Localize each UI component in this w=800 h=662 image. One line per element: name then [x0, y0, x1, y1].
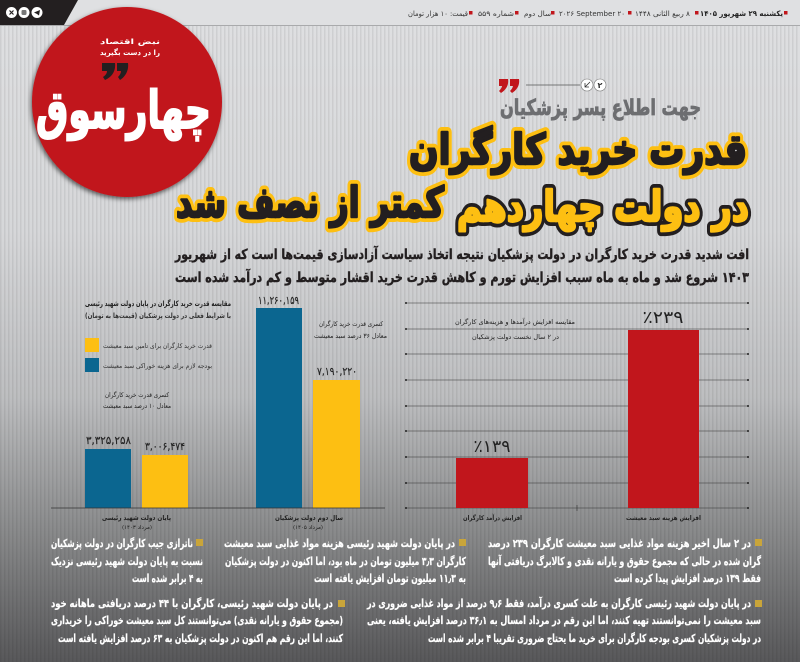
bullet text: top left: ناترازی جیب کارگران در دولت پزشکیان — [51, 537, 193, 550]
bars: second year of Pezeshkian government: ۷,۱۹۰,۲۲۰ — [317, 365, 357, 378]
headline line 2: black part: کمتر از نصف شد — [176, 178, 444, 228]
logo: red circle — [32, 7, 222, 197]
bullet text: top right: فقط ۱۳۹ درصد افزایش پیدا کرده است — [614, 572, 761, 585]
chart: purchasing power comparison — [51, 294, 387, 531]
legend: بودجه لازم برای هزینه خوراکی سبد معیشت — [103, 362, 212, 370]
header date line: سال دوم — [524, 10, 551, 18]
header bar: social icons — [0, 0, 78, 25]
chart note: در ۲ سال نخست دولت پزشکیان — [472, 333, 559, 341]
chart title — [85, 299, 231, 320]
bullet text: top left: نسبت به پایان دولت شهید رئیسی نزدیک — [51, 555, 203, 568]
note: first period shortfall: کسری قدرت خرید کارگران — [105, 391, 170, 399]
axis labels: سال دوم دولت پزشکیان — [275, 514, 343, 522]
bars: end of Raisi government — [85, 434, 188, 508]
axis labels: (مرداد ۱۴۰۵) — [293, 525, 323, 531]
header date line — [408, 9, 788, 18]
bullet text: bottom left: در پایان دولت شهید رئیسی، کارگران با ۴۴ درصد دریافتی ماهانه خود — [51, 597, 333, 610]
bullet text: top middle: در پایان دولت شهید رئیسی هزینه مواد غذایی سبد معیشت — [224, 537, 455, 550]
note: second period shortfall: کسری قدرت خرید کارگران — [319, 320, 384, 328]
bars: second year of Pezeshkian government — [256, 294, 360, 508]
bar: income increase: افزایش درآمد کارگران — [463, 513, 522, 522]
logo: red circle: نبض اقتصاد — [100, 37, 160, 46]
chart title: مقایسه قدرت خرید کارگران در پایان دولت شهید رئیسی — [85, 299, 231, 308]
chart: income vs cost increase — [405, 302, 749, 522]
axis labels: پایان دولت شهید رئیسی — [102, 514, 171, 522]
legend: قدرت خرید کارگران برای تامین سبد معیشت — [103, 342, 212, 350]
kicker: جهت اطلاع پسر پزشکیان — [500, 96, 701, 121]
grid end dots — [405, 302, 749, 509]
bars: end of Raisi government: ۳,۰۰۶,۴۷۴ — [145, 440, 185, 453]
axis labels: (مرداد ۱۴۰۳) — [122, 525, 152, 531]
quote marks and numbered marker — [499, 79, 606, 93]
note: second period shortfall: معادل ۳۶ درصد سبد معیشت — [314, 332, 387, 340]
note: second period shortfall — [314, 320, 387, 340]
header date line: شماره ۵۵۹ — [478, 10, 514, 18]
lead paragraph — [174, 245, 749, 286]
logo: red circle: را در دست بگیرید — [100, 48, 160, 57]
chart title: با شرایط فعلی در دولت پزشکیان (قیمت‌ها به تومان) — [85, 312, 231, 320]
chart note: مقایسه افزایش درآمدها و هزینه‌های کارگران — [455, 317, 575, 326]
axis labels — [102, 514, 343, 531]
note: first period shortfall — [103, 391, 171, 410]
bullet text: top left: به ۴ برابر شده است — [132, 572, 203, 585]
header date line: ۸ ربیع الثانی ۱۴۴۸ — [635, 10, 690, 18]
bullet text: top right: در ۲ سال اخیر هزینه مواد غذایی سبد معیشت کارگران ۲۳۹ درصد — [488, 537, 751, 550]
chart note — [455, 317, 575, 341]
axis — [51, 507, 385, 509]
bullet text: top middle: به ۱۱٫۳ میلیون تومان افزایش یافته است — [314, 572, 466, 585]
bar: cost of living increase: ٪۲۳۹ — [642, 308, 684, 328]
bar: income increase: ٪۱۳۹ — [474, 437, 510, 457]
header date line: یکشنبه ۲۹ شهریور ۱۴۰۵ — [700, 9, 783, 18]
bullet text: top middle: کارگران ۳٫۳ میلیون تومان در ماه بود، اما اکنون در دولت پزشکیان — [225, 555, 466, 568]
grid lines — [406, 303, 748, 511]
bullet text: top right — [488, 537, 762, 585]
bullet text: bottom right — [366, 596, 762, 646]
bar: cost of living increase — [626, 308, 701, 522]
legend — [85, 338, 212, 372]
header date line: قیمت: ۱۰ هزار تومان — [408, 10, 468, 18]
bullet text: top left — [51, 537, 203, 585]
bullet text: bottom left: کنند، اما این رقم هم اکنون در دولت پزشکیان به ۶۳ درصد افزایش یافته است — [58, 632, 343, 645]
quote marks and numbered marker: ۲ — [598, 81, 603, 90]
bullet text: bottom left — [51, 597, 345, 645]
bars: second year of Pezeshkian government: ۱۱,۲۶۰,۱۵۹ — [258, 294, 299, 307]
headline line 2: black part: کمتر از نصف شد — [176, 178, 444, 228]
logo: red circle: چهارسوق — [36, 81, 211, 141]
header date line: ۲۰۲۶ September ۲۰ — [559, 10, 625, 18]
bullet text: top middle — [224, 537, 466, 585]
note: first period shortfall: معادل ۱۰ درصد سبد معیشت — [103, 402, 171, 410]
bar: income increase — [456, 437, 528, 522]
bars: end of Raisi government: ۳,۳۲۵,۲۵۸ — [86, 434, 131, 447]
bullet text: bottom left: (مجموع حقوق و یارانه نقدی) می‌توانستند کل سبد معیشت خوراکی را خریداری — [51, 614, 343, 627]
bar: cost of living increase: افزایش هزینه سبد معیشت — [626, 514, 701, 522]
